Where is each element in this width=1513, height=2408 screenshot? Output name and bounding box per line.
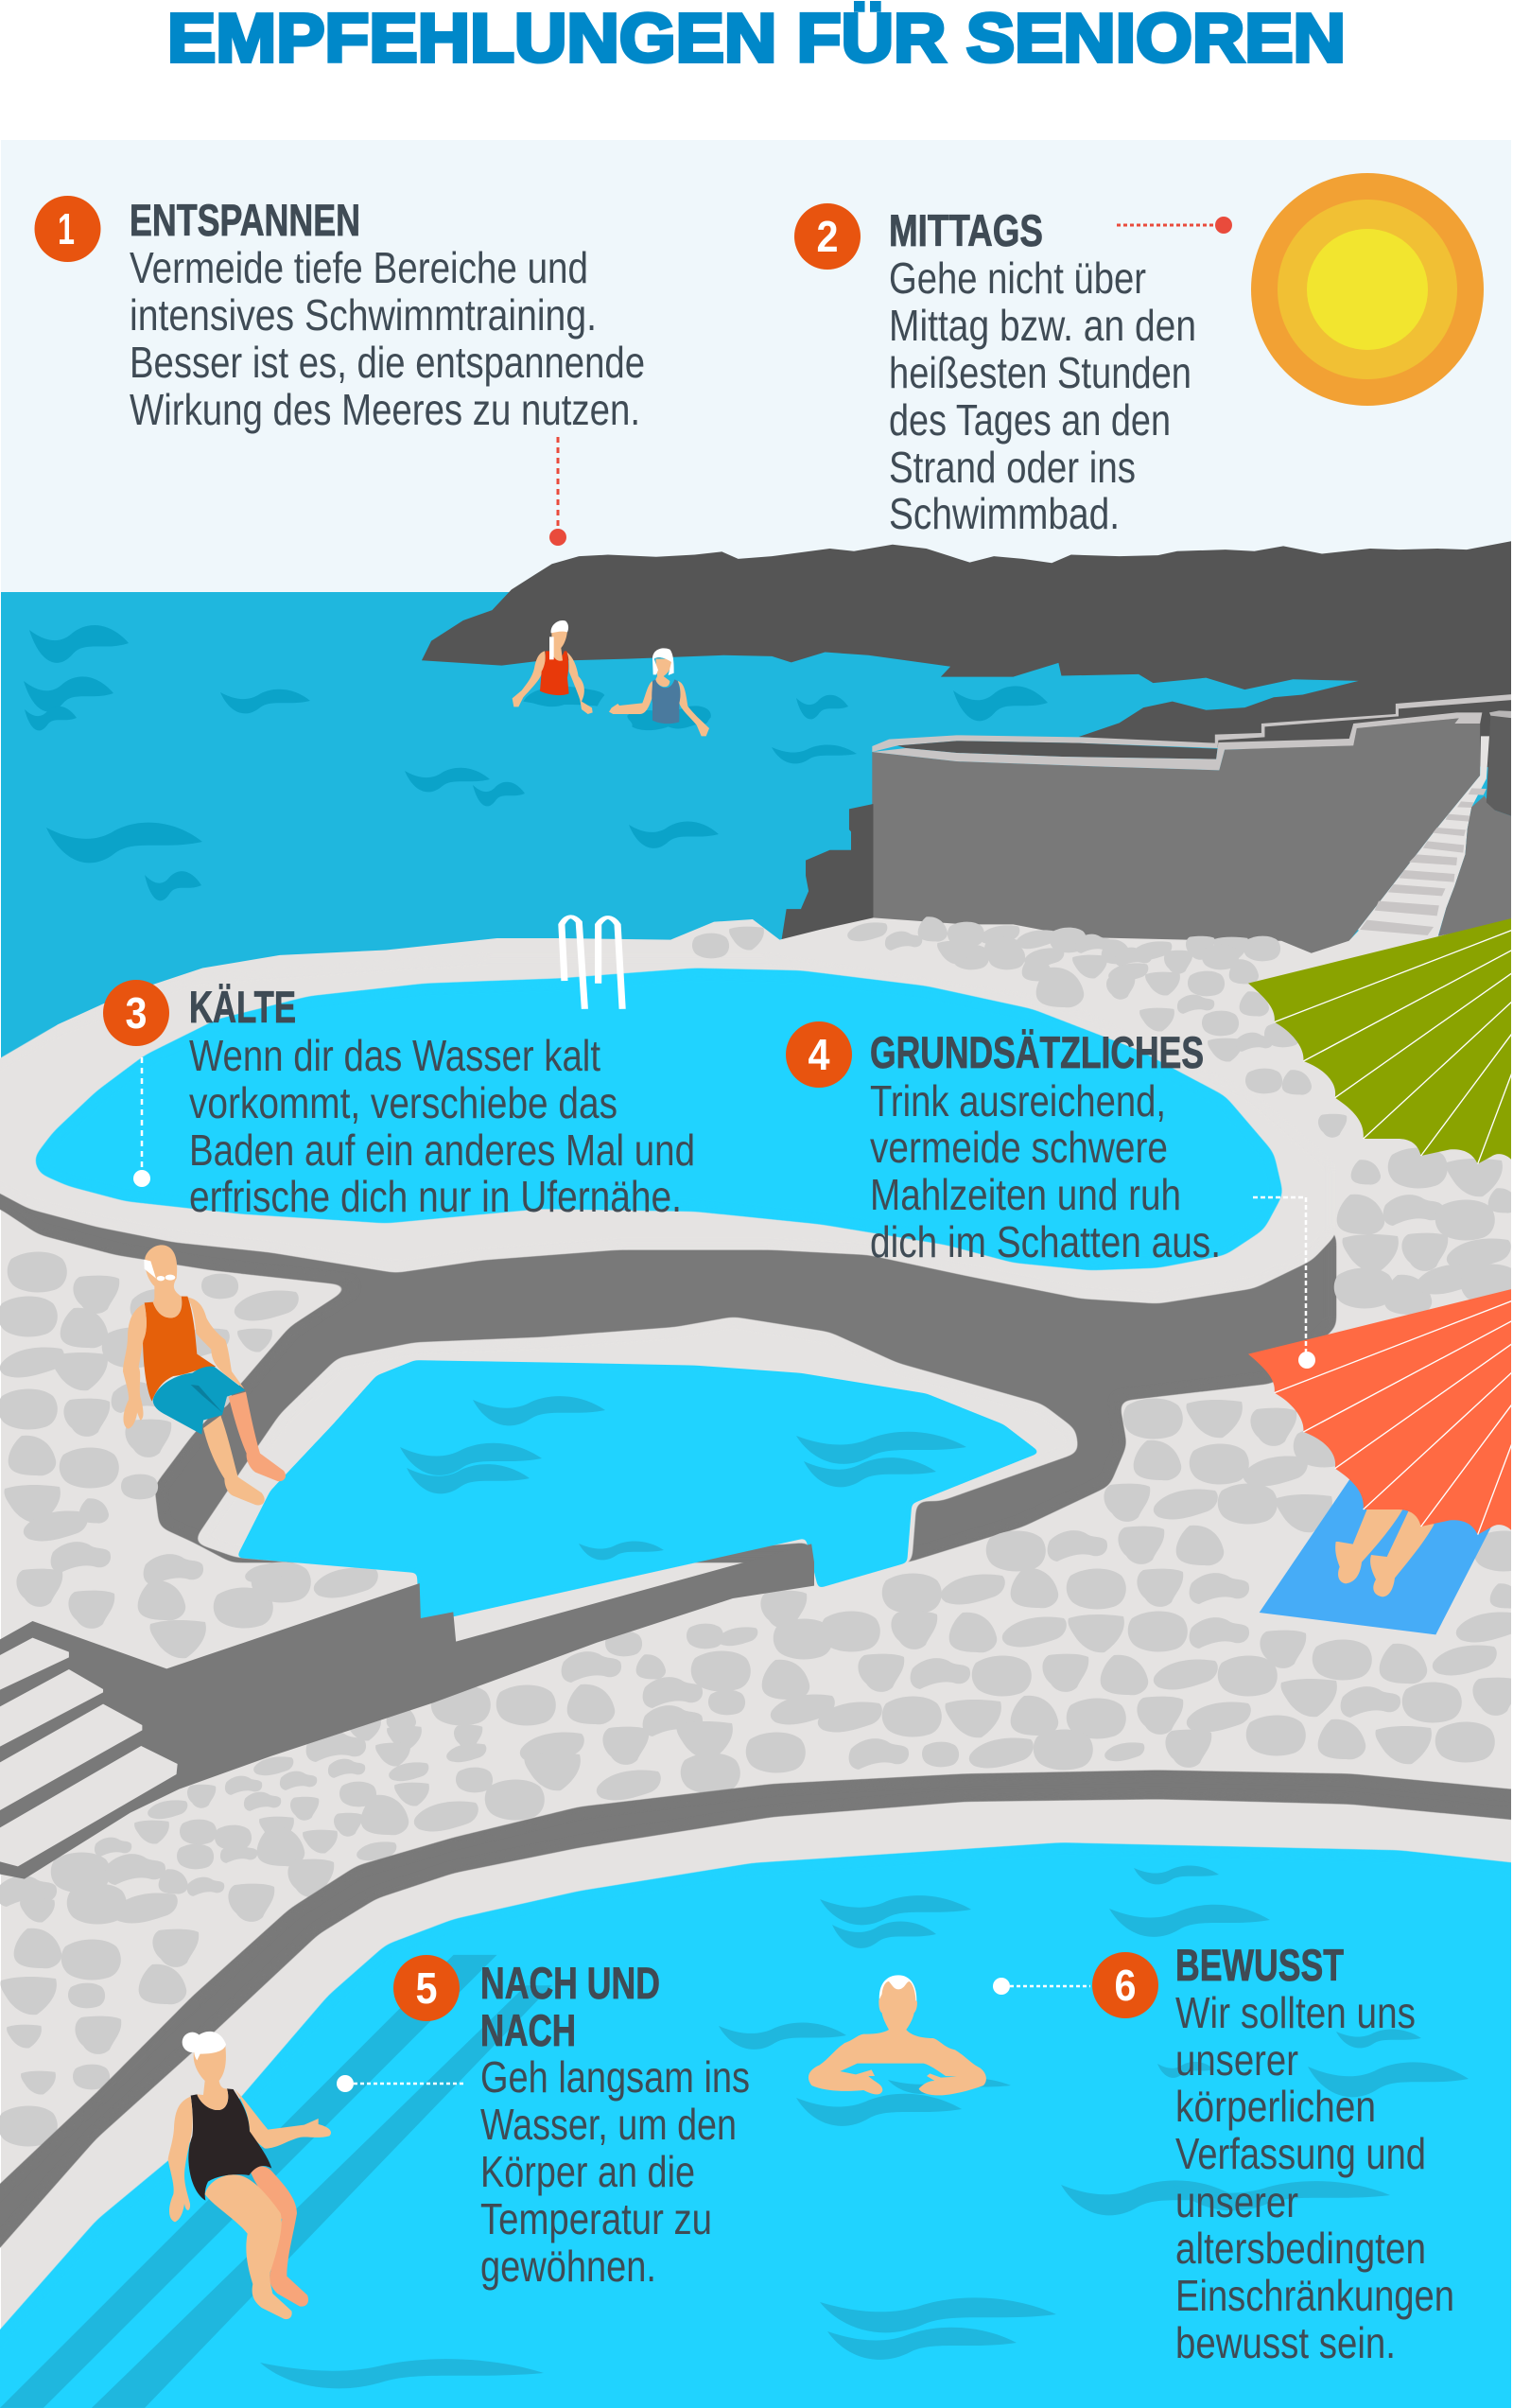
sky background (1, 140, 1513, 594)
paving stones (0, 916, 1513, 2146)
body 1: Besser ist es, die entspannende (130, 338, 645, 387)
body 2: Schwimmbad. (889, 489, 1120, 538)
badge 1: 1 (58, 204, 75, 253)
swimmer with blue top (609, 648, 711, 736)
body 6 (1175, 1988, 1454, 2367)
badge 2 (794, 203, 861, 270)
dark rocky coast (422, 541, 1513, 769)
body 4: dich im Schatten aus. (870, 1217, 1221, 1266)
connector 6 (993, 1978, 1090, 1995)
body 3: vorkommt, verschiebe das (189, 1078, 617, 1127)
body 3: Wenn dir das Wasser kalt (189, 1031, 600, 1080)
upper pool rim (0, 952, 1336, 1304)
middle pool rim (193, 1317, 1079, 1588)
dark channel between pools (0, 1111, 1336, 1562)
heading 4: GRUNDSÄTZLICHES (870, 1027, 1204, 1077)
body 2: Mittag bzw. an den (889, 301, 1196, 350)
badge 4 (786, 1021, 852, 1088)
heading 5: NACH UND (480, 1958, 660, 2008)
badge 1 (34, 196, 100, 262)
body 2: heißesten Stunden (889, 348, 1191, 397)
connector 2 (1117, 217, 1232, 234)
tip 4: Grundsätzliches (786, 1021, 1221, 1266)
middle pool waves (400, 1396, 966, 1560)
swimming man (809, 1975, 986, 2095)
tip 2: Mittags (794, 203, 1196, 538)
sitting man (123, 1245, 286, 1505)
body 2 (889, 253, 1196, 538)
stair treads (0, 1638, 178, 1866)
connector 4 (1253, 1197, 1315, 1369)
body 6: unserer (1175, 2035, 1298, 2085)
badge 6: 6 (1114, 1961, 1137, 2010)
body 5: Temperatur zu (480, 2194, 712, 2243)
stone wall with rim and stairs (851, 694, 1513, 965)
body 6: unserer (1175, 2177, 1298, 2226)
connector 5 (337, 2075, 463, 2092)
body 4: Mahlzeiten und ruh (870, 1170, 1181, 1219)
tip 5: Nach und nach (393, 1955, 750, 2291)
body 5: Körper an die (480, 2147, 695, 2196)
sea (1, 592, 1513, 1178)
icon: sun (1251, 173, 1484, 406)
body 3: Baden auf ein anderes Mal und (189, 1125, 695, 1175)
curved wall (0, 1771, 1513, 2292)
body 3 (189, 1031, 695, 1221)
heading 2: MITTAGS (889, 205, 1043, 255)
orange parasol (1248, 1289, 1513, 1535)
upper pool water (34, 968, 1283, 1270)
body 4: vermeide schwere (870, 1123, 1168, 1172)
heading 5: NACH (480, 2005, 576, 2055)
badge 3 (103, 980, 169, 1046)
middle pool water (236, 1360, 1040, 1624)
paved ground (1, 917, 1513, 2408)
body 6: Verfassung und (1175, 2129, 1426, 2178)
tip 6: Bewusst (1092, 1940, 1454, 2367)
body 5: gewöhnen. (480, 2242, 656, 2291)
body 4: Trink ausreichend, (870, 1076, 1166, 1125)
heading 3: KÄLTE (189, 982, 296, 1032)
badge 2: 2 (817, 212, 838, 261)
heading 6: BEWUSST (1175, 1940, 1344, 1990)
body 1: intensives Schwimmtraining. (130, 290, 597, 340)
heading 1: ENTSPANNEN (130, 195, 360, 245)
body 1: Vermeide tiefe Bereiche und (130, 243, 588, 292)
badge 5 (393, 1955, 460, 2021)
title: EMPFEHLUNGEN FÜR SENIOREN (167, 1, 1346, 77)
body 6: bewusst sein. (1175, 2318, 1396, 2367)
body 5: Geh langsam ins (480, 2052, 750, 2102)
seated woman (168, 2032, 331, 2319)
body 2: Strand oder ins (889, 443, 1136, 492)
badge 3: 3 (125, 988, 148, 1038)
body 6: Einschränkungen (1175, 2271, 1454, 2320)
badge 4: 4 (808, 1030, 830, 1079)
body 5: Wasser, um den (480, 2100, 737, 2149)
body 5 (480, 2052, 750, 2291)
sea waves (24, 625, 1048, 900)
body 6: Wir sollten uns (1175, 1988, 1416, 2037)
heading 5 (480, 1958, 660, 2055)
tip 1: Entspannen (34, 195, 645, 434)
connector 1 (549, 437, 566, 546)
swimmers in the sea (513, 620, 711, 736)
pool steps (0, 1955, 552, 2408)
lower pool water (0, 1842, 1513, 2408)
walkway block (0, 1544, 814, 1879)
stairs and grey walkway (0, 1544, 814, 1879)
connector 3 (133, 1057, 150, 1187)
swimmer with red top (513, 620, 604, 714)
body 6: körperlichen (1175, 2082, 1376, 2131)
tip 3: Kälte (103, 980, 695, 1221)
body 1: Wirkung des Meeres zu nutzen. (130, 385, 640, 434)
pool ladder (562, 916, 622, 1009)
body 6: altersbedingten (1175, 2224, 1426, 2273)
body 2: Gehe nicht über (889, 253, 1146, 303)
badge 6 (1092, 1952, 1158, 2018)
body 4 (870, 1076, 1221, 1266)
lower pool waves (260, 1866, 1469, 2388)
blue towel with sunbather legs (1260, 1479, 1492, 1634)
badge 5: 5 (416, 1963, 437, 2013)
green parasol (1248, 918, 1513, 1164)
body 2: des Tages an den (889, 395, 1171, 445)
body 1 (130, 243, 645, 434)
dark cliff beside the wall (782, 804, 873, 940)
body 3: erfrische dich nur in Ufernähe. (189, 1172, 682, 1221)
